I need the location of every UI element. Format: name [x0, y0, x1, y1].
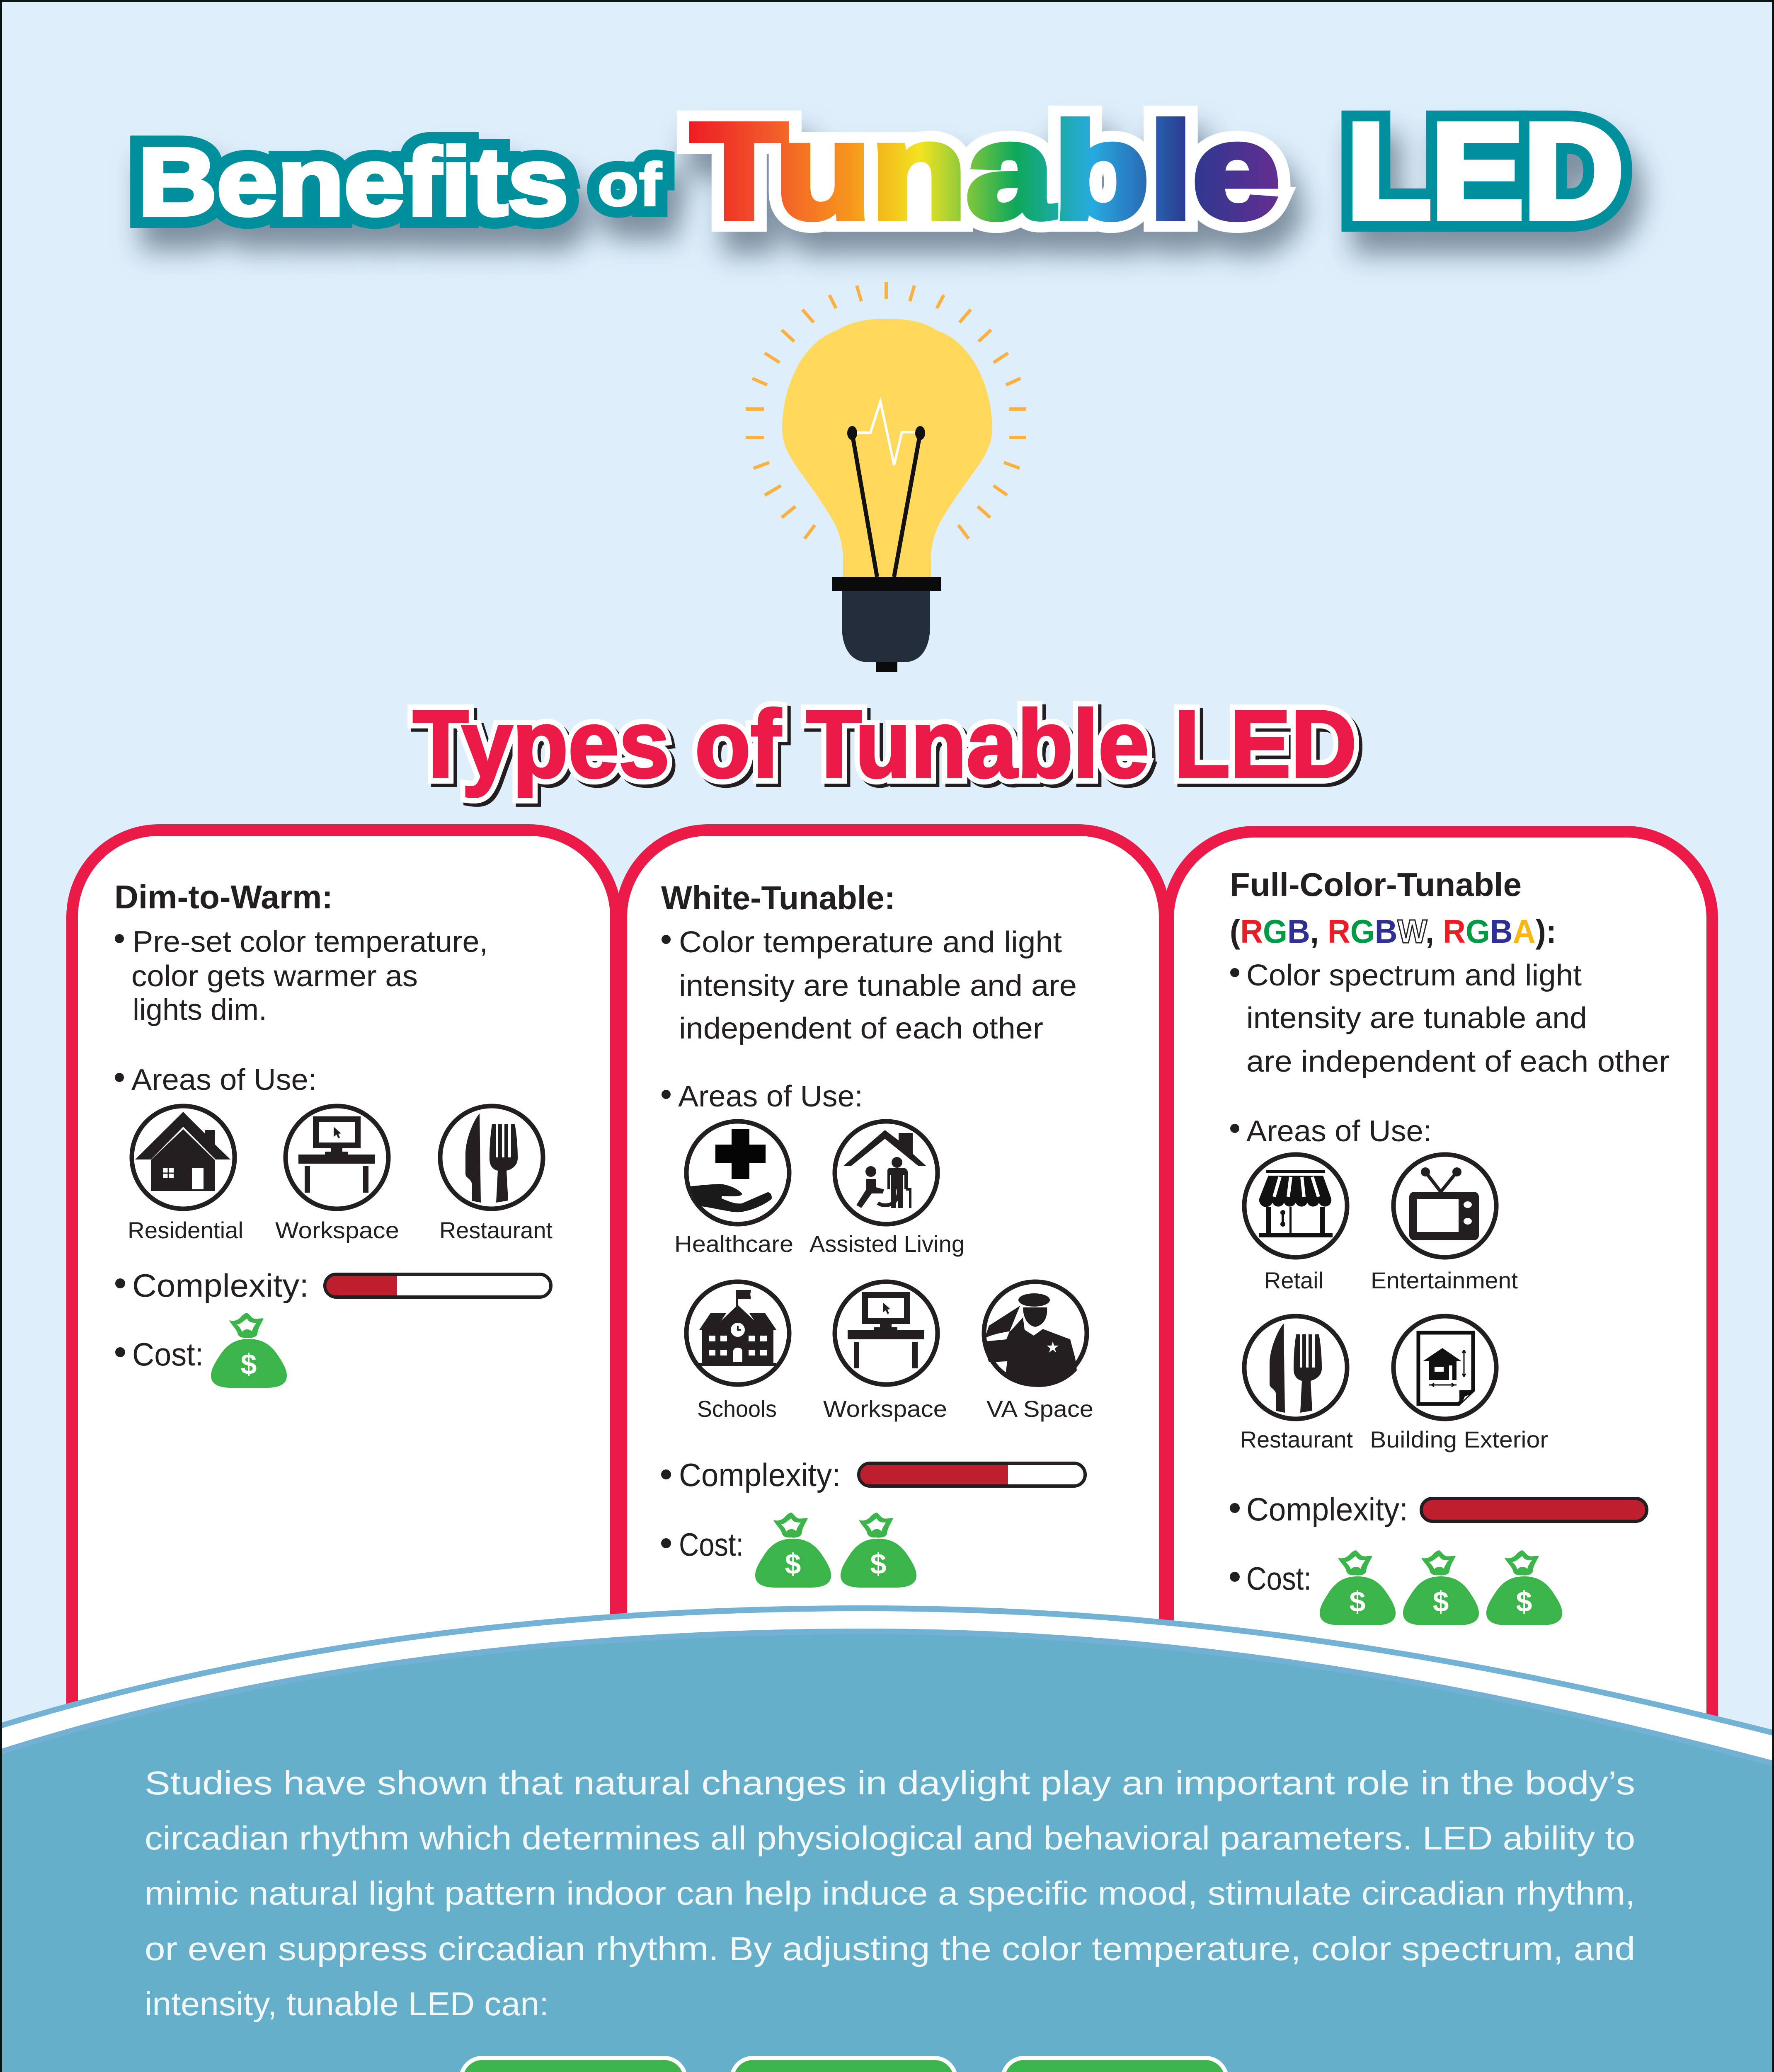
description: intensity are tunable and are — [679, 969, 1077, 1002]
benefit: reduce stress — [732, 2058, 956, 2072]
label: Entertainment — [1371, 1267, 1518, 1293]
description — [115, 925, 488, 1026]
panel heading: Full-Color-Tunable — [1230, 866, 1522, 903]
icon: entertainment — [1394, 1155, 1496, 1257]
label: Retail — [1264, 1267, 1323, 1293]
label: Restaurant — [1240, 1426, 1353, 1452]
intro paragraph — [145, 1765, 1635, 2022]
panel frame — [621, 830, 1165, 1816]
panel heading: Dim-to-Warm: — [114, 879, 333, 915]
description: lights dim. — [133, 993, 267, 1026]
green tile — [461, 2058, 686, 2072]
areas of use: Areas of Use: — [1246, 1115, 1432, 1148]
description: are independent of each other — [1246, 1045, 1670, 1078]
complexity — [661, 1457, 1085, 1493]
benefit: improve sleep quality — [1003, 2058, 1227, 2072]
bulb filament — [847, 402, 925, 577]
cost: Cost: — [132, 1336, 204, 1372]
intro paragraph: mimic natural light pattern indoor can help induce a specific mood, stimulate circadian rhythm, — [145, 1875, 1635, 1912]
icon: VA space — [984, 1282, 1087, 1387]
bulb base — [832, 577, 941, 672]
intro paragraph: circadian rhythm which determines all physiological and behavioral parameters. LED ability to — [145, 1820, 1635, 1857]
label: Workspace — [275, 1217, 399, 1243]
cost: $ — [870, 1548, 886, 1580]
icon: residential — [132, 1106, 235, 1209]
intro paragraph: Studies have shown that natural changes in daylight play an important role in the body’s — [145, 1765, 1635, 1801]
icon: light bulb — [746, 282, 1026, 672]
arc: lighter lower edge — [0, 1629, 1774, 1823]
description: Color temperature and light — [679, 926, 1062, 959]
cost — [661, 1513, 916, 1588]
cost — [1230, 1550, 1562, 1625]
icon: healthcare — [686, 1121, 789, 1224]
complexity — [1230, 1491, 1647, 1527]
panel heading: White-Tunable: — [661, 879, 895, 916]
label: Residential — [128, 1217, 243, 1243]
benefit: physical and emotional health — [448, 2058, 703, 2072]
title — [138, 96, 1624, 247]
cost — [115, 1313, 287, 1388]
icon: retail — [1244, 1155, 1347, 1257]
panel frame — [72, 830, 616, 1816]
complexity — [115, 1267, 551, 1304]
label: Restaurant — [439, 1217, 553, 1243]
label: Workspace — [823, 1396, 947, 1422]
areas of use: Areas of Use: — [131, 1063, 317, 1097]
heading: types of tunable LED: Types of Tunable LED — [413, 690, 1357, 797]
panel: lower blue section — [0, 1634, 1774, 2072]
cost: $ — [785, 1548, 801, 1580]
complexity: Complexity: — [1246, 1491, 1408, 1527]
panel heading: (RGB, RGBW, RGBA): — [1230, 913, 1556, 950]
description — [1230, 959, 1670, 1078]
panel: dim-to-warm — [72, 830, 616, 1816]
description: Color spectrum and light — [1246, 959, 1582, 992]
icon: restaurant — [440, 1106, 543, 1209]
arc: blue outline — [0, 1605, 1774, 1823]
cost: $ — [1516, 1585, 1532, 1618]
description: independent of each other — [679, 1012, 1043, 1045]
cost: $ — [1350, 1585, 1365, 1618]
cost: Cost: — [1246, 1560, 1311, 1597]
title shadow — [138, 96, 1624, 247]
panel heading — [1230, 866, 1556, 950]
description — [662, 926, 1077, 1045]
areas of use: Areas of Use: — [678, 1080, 863, 1113]
description: intensity are tunable and — [1246, 1002, 1587, 1035]
panel frame — [1168, 832, 1712, 1818]
label: Schools — [697, 1396, 777, 1422]
title word: LED: LED — [1347, 96, 1624, 247]
cost: $ — [241, 1348, 257, 1380]
title word: Tunable: Tunable — [691, 96, 1280, 247]
complexity: Complexity: — [132, 1267, 309, 1304]
icon: restaurant — [1244, 1316, 1347, 1419]
description: color gets warmer as — [131, 960, 418, 993]
intro paragraph: intensity, tunable LED can: — [145, 1985, 549, 2022]
panel: full-color-tunable — [1168, 832, 1712, 1818]
green tile — [732, 2058, 956, 2072]
description: Pre-set color temperature, — [133, 925, 488, 959]
intro paragraph: or even suppress circadian rhythm. By adjusting the color temperature, color spectrum, and — [145, 1930, 1635, 1967]
icon: workspace — [286, 1106, 388, 1209]
label: Assisted Living — [809, 1231, 965, 1257]
label: Building Exterior — [1370, 1426, 1548, 1452]
cost: $ — [1433, 1585, 1449, 1618]
label: Healthcare — [674, 1231, 793, 1257]
bulb rays — [746, 282, 1026, 539]
icon: workspace — [835, 1282, 938, 1385]
bulb glass — [782, 319, 992, 578]
green tile — [1003, 2058, 1227, 2072]
icon: building exterior — [1394, 1316, 1496, 1419]
complexity: Complexity: — [679, 1457, 841, 1493]
arc: white band — [0, 1611, 1774, 1823]
title word: Benefits: Benefits — [138, 128, 568, 235]
label: VA Space — [986, 1396, 1093, 1422]
icon: schools — [686, 1282, 789, 1385]
cost: Cost: — [679, 1526, 744, 1563]
icon: assisted living — [835, 1121, 938, 1224]
panel: white-tunable — [621, 830, 1165, 1816]
title word: of: of — [597, 150, 662, 219]
